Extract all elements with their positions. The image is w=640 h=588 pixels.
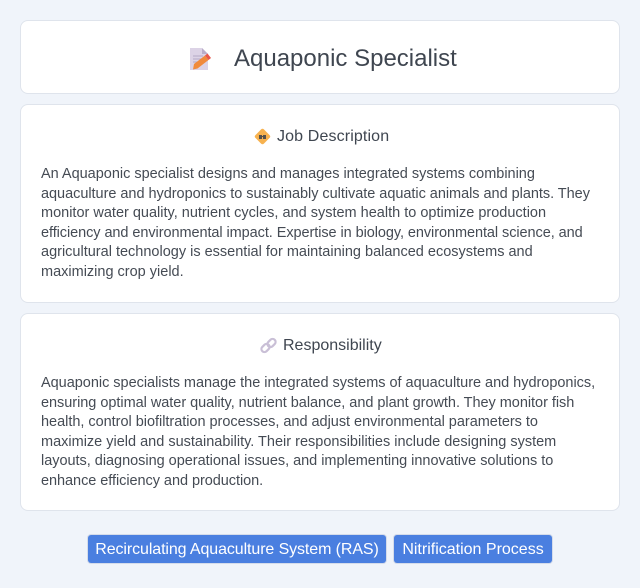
tag: RAS xyxy=(88,535,386,563)
heading: Job Description xyxy=(277,128,389,145)
body text xyxy=(41,375,595,489)
heading: Responsibility xyxy=(283,337,382,354)
body text: ensuring optimal water quality, nutrient balance, and plant growth. They monitor fish xyxy=(41,395,574,411)
body text: maximize yield and sustainability. Their responsibilities include designing system xyxy=(41,434,556,450)
tag: RAS: Recirculating Aquaculture System (RAS) xyxy=(95,541,379,558)
body text: maximizing crop yield. xyxy=(41,264,184,280)
body text: monitor water quality, nutrient cycles, and system health to optimize production xyxy=(41,205,546,221)
body text: enhance efficiency and production. xyxy=(41,473,263,489)
tag: nitrification xyxy=(394,535,552,563)
panel: job description xyxy=(20,104,620,303)
panel: responsibility xyxy=(20,313,620,511)
body text: agricultural technology is essential for maintaining balanced ecosystems and xyxy=(41,244,533,260)
body text: efficiency and environmental impact. Expertise in biology, environmental science, and xyxy=(41,225,583,241)
body text: health, control biofiltration processes, and adjust environmental parameters to xyxy=(41,414,538,430)
icon: diamond badge xyxy=(254,128,270,144)
body text: aquaculture and hydroponics to sustainably cultivate aquatic animals and plants. They xyxy=(41,186,590,202)
tag: nitrification: Nitrification Process xyxy=(402,541,544,558)
body text: Aquaponic specialists manage the integrated systems of aquaculture and hydroponics, xyxy=(41,375,595,391)
icon: document with pencil xyxy=(190,48,211,70)
body text xyxy=(41,166,590,280)
icon: chain link xyxy=(260,338,277,354)
body text: An Aquaponic specialist designs and manages integrated systems combining xyxy=(41,166,535,182)
title text: Aquaponic Specialist xyxy=(234,45,457,72)
panel: title xyxy=(20,20,620,94)
body text: layouts, diagnosing operational issues, and implementing innovative solutions to xyxy=(41,453,553,469)
